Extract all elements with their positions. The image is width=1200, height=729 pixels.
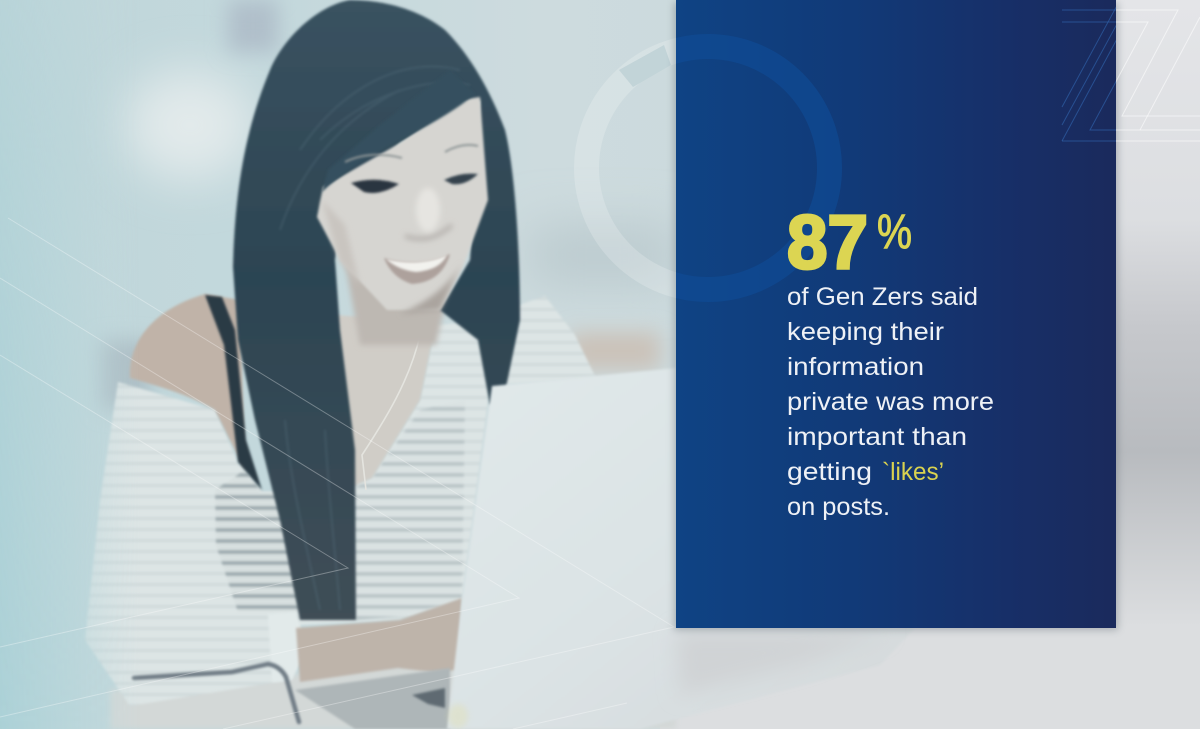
ring on photo	[574, 39, 676, 297]
panel: blue statistic card	[676, 0, 1116, 628]
necklace	[362, 335, 420, 490]
right eye	[444, 174, 478, 184]
glasses	[134, 664, 299, 722]
diagonal triangle outlines	[0, 218, 674, 729]
smile	[384, 254, 450, 284]
face shading	[400, 262, 462, 314]
cheek shading	[322, 200, 360, 285]
sleeve cuff	[268, 612, 306, 682]
zigzag lines inside panel	[1062, 6, 1116, 142]
left teal fade	[0, 38, 112, 729]
body text: getting	[787, 458, 872, 486]
chest	[335, 315, 436, 490]
sweater	[85, 296, 596, 706]
percent sign: %	[877, 206, 912, 259]
ring on panel	[676, 34, 842, 302]
face	[317, 97, 488, 310]
sweater left-of-hair stripes	[215, 470, 300, 612]
sweater right-of-hair stripes	[352, 400, 465, 620]
desk surface	[110, 640, 676, 729]
statistic: 87%	[787, 200, 912, 286]
hair	[233, 0, 520, 620]
hair sheen	[280, 67, 470, 610]
body text: keeping their	[787, 318, 944, 346]
highlighted word: `likes’	[882, 458, 944, 486]
keyboard keys	[412, 688, 445, 708]
nose highlight	[416, 188, 440, 232]
body text: important than	[787, 423, 967, 451]
body text: on posts.	[787, 493, 890, 521]
laptop shadow	[676, 632, 890, 695]
body text	[787, 283, 994, 521]
nose shadow	[405, 225, 452, 239]
body text: of Gen Zers said	[787, 283, 978, 311]
ring gap segment	[619, 45, 671, 87]
body text: private was more	[787, 388, 994, 416]
bare shoulder	[130, 294, 245, 470]
bra strap	[205, 295, 262, 490]
number 87: 87	[787, 200, 868, 286]
forearm	[296, 598, 462, 682]
laptop base	[295, 668, 450, 729]
right eyebrow	[445, 145, 478, 152]
photo: woman at laptop	[85, 0, 915, 729]
zigzag lines outside panel	[1116, 10, 1200, 142]
body text: information	[787, 353, 924, 381]
left eyebrow	[345, 155, 402, 162]
left eye	[351, 180, 399, 193]
laptop	[447, 368, 915, 729]
panel shadow	[674, 2, 1118, 630]
hair fringe	[322, 70, 475, 192]
neck	[345, 262, 445, 345]
teeth	[386, 255, 447, 272]
yellow reflection	[448, 704, 468, 728]
